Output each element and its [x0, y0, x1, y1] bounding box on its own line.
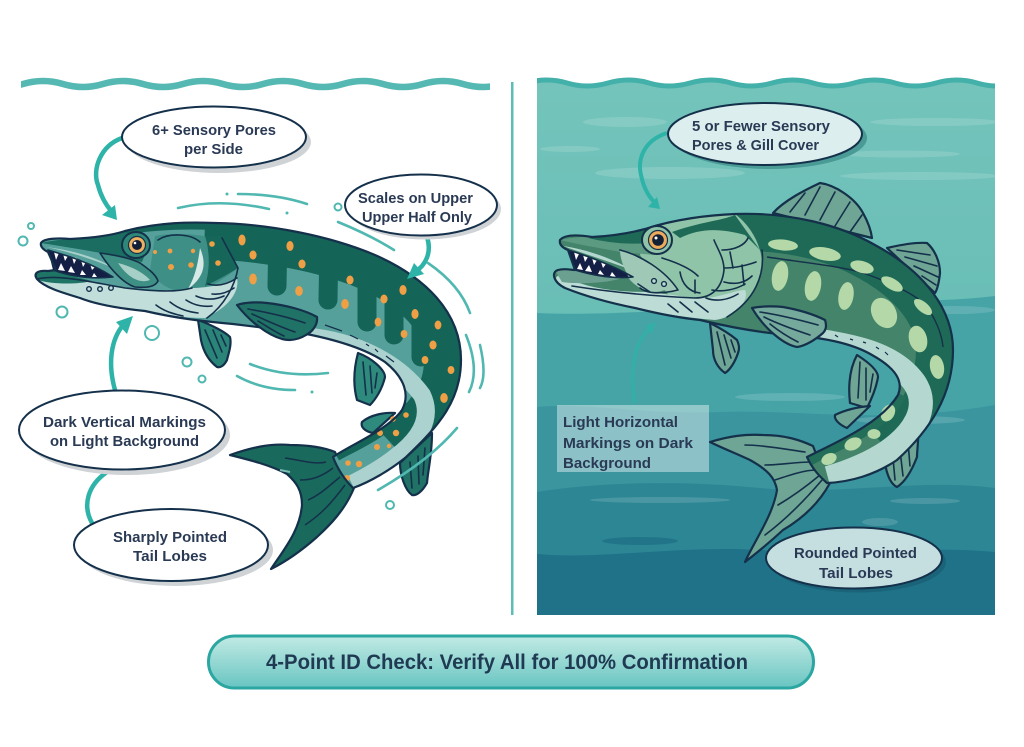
callout: rounded pointed tail: Tail Lobes: [819, 565, 893, 582]
banner: 4-point ID check: 4-Point ID Check: Verify All for 100% Confirmation: [266, 651, 748, 674]
callout: light horizontal markings: Background: [563, 455, 651, 472]
callout: light horizontal markings: Light Horizontal: [563, 414, 678, 431]
left fish body: [36, 222, 461, 488]
right pectoral fin: [752, 306, 826, 347]
right fish body: [554, 214, 953, 483]
left pike illustration: [36, 222, 461, 569]
callout: scales: Scales on Upper: [358, 190, 473, 207]
arrow: tail lobes left: [87, 472, 107, 523]
arrow: scales: [407, 237, 429, 279]
left fish head: [36, 232, 238, 318]
callout: 5 or fewer sensory pores: [668, 103, 867, 169]
callout: rounded pointed tail: [766, 528, 946, 592]
arrow: light markings: [633, 322, 656, 403]
callout: light horizontal markings: [557, 405, 709, 472]
callout: light horizontal markings: Markings on Dark: [563, 435, 694, 452]
right fish head: [556, 214, 763, 320]
callout: 6+ sensory pores: [122, 106, 311, 173]
callout: dark vertical markings: [19, 390, 230, 475]
right fish eye: [642, 226, 672, 254]
left fish fins: [198, 320, 432, 569]
banner: 4-point ID check: [208, 636, 814, 688]
callout: rounded pointed tail: Rounded Pointed: [794, 545, 917, 562]
centre divider: [511, 82, 514, 615]
arrow: sensory pores left: [96, 138, 122, 220]
callout: scales: Upper Half Only: [362, 209, 473, 226]
left water line: [0, 81, 503, 87]
callout: dark vertical markings: Dark Vertical Markings: [43, 414, 206, 431]
panel: water background: [526, 78, 1018, 615]
left fish spots: [238, 234, 454, 481]
right fish fins: [710, 183, 940, 562]
callout: 5 or fewer sensory pores: 5 or Fewer Sensory: [692, 118, 831, 135]
callout: 5 or fewer sensory pores: Pores & Gill Cover: [692, 137, 819, 154]
right fish spots: [768, 238, 946, 467]
arrow: sensory pores right: [640, 133, 667, 209]
motion lines and bubbles: [18, 192, 484, 509]
callout: sharply pointed tail: [74, 509, 273, 586]
left fish eye: [122, 232, 150, 258]
left pectoral fin: [237, 302, 317, 340]
callout: sharply pointed tail: Sharply Pointed: [113, 529, 227, 546]
right pickerel illustration: [554, 183, 953, 562]
callout: sharply pointed tail: Tail Lobes: [133, 548, 207, 565]
callout: dark vertical markings: on Light Background: [50, 433, 199, 450]
right fish outline: [554, 214, 953, 483]
callout: 6+ sensory pores: 6+ Sensory Pores: [152, 122, 276, 139]
arrow: dark markings: [111, 316, 133, 390]
callout: 6+ sensory pores: per Side: [184, 141, 243, 158]
callout: scales: [345, 174, 501, 240]
left fish outline: [36, 223, 461, 488]
